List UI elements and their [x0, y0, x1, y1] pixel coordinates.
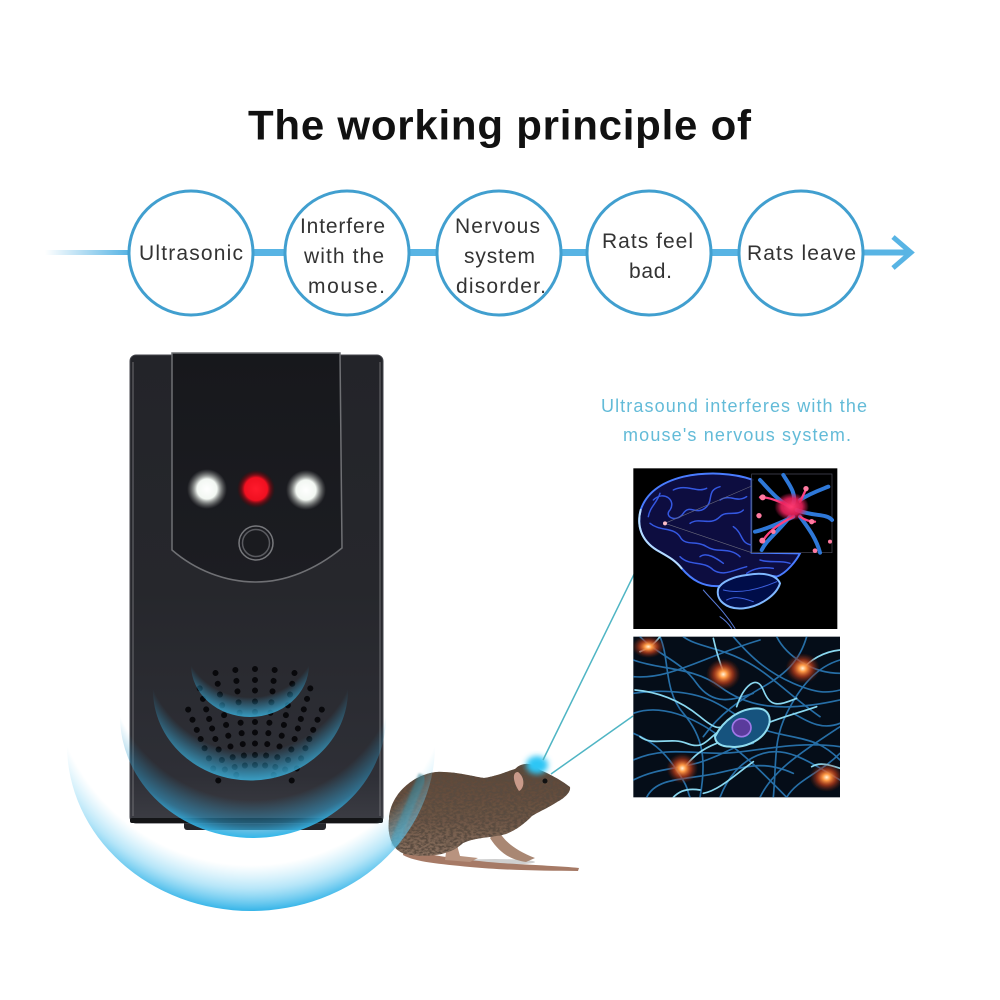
process flow: [45, 191, 911, 315]
middle wave: [153, 690, 348, 780]
rat hind foot: [445, 838, 478, 862]
cerebellum: [718, 574, 780, 609]
brain image: [633, 468, 837, 629]
inner wave: [191, 665, 309, 717]
step: Ultrasonic: Ultrasonic: [139, 242, 243, 265]
LED centre: [237, 470, 275, 508]
neuron: [755, 475, 832, 553]
brain outline: [639, 474, 800, 586]
inset highlight box: [752, 474, 832, 553]
rat front leg: [490, 830, 535, 862]
device body: [130, 355, 383, 823]
step: Nervous system disorder: disorder.: [456, 275, 546, 298]
device: [130, 353, 383, 830]
step: Nervous system disorder: Nervous: [455, 215, 540, 238]
nerve fibres, bright: [635, 637, 840, 797]
nucleus: [732, 719, 751, 737]
caption: ultrasound: Ultrasound interferes with the: [601, 396, 867, 416]
head glow: [526, 756, 548, 774]
neural network image: [632, 635, 844, 797]
step: Rats feel bad: bad.: [629, 260, 672, 283]
LED right: [286, 470, 326, 510]
control panel: [172, 353, 342, 582]
step: Interfere with the mouse: with the: [303, 245, 384, 268]
nerve fibres, dim: [633, 637, 840, 797]
step: Nervous system disorder: [437, 191, 561, 315]
rat shadow: [455, 859, 535, 865]
step: Rats leave: [739, 191, 863, 315]
step: Rats leave: Rats leave: [747, 242, 856, 265]
large device wave: [120, 716, 386, 838]
wave band over rat rear: [393, 775, 423, 846]
rat body: [389, 764, 570, 856]
rat tail: [403, 848, 579, 871]
step: Interfere with the mouse: [285, 191, 409, 315]
rat eye: [542, 778, 548, 784]
folds: [648, 487, 790, 573]
infographic canvas: [49, 109, 915, 911]
ultrasonic waves: [67, 665, 435, 911]
power button: [239, 526, 273, 560]
step: Nervous system disorder: system: [464, 245, 535, 268]
step: Interfere with the mouse: mouse.: [308, 275, 385, 298]
rat ear: [514, 772, 523, 791]
connector lines: [543, 552, 645, 774]
orange synapse glows: [633, 636, 664, 658]
rat: [389, 756, 579, 871]
caption: ultrasound: [601, 396, 867, 445]
connectors: [253, 249, 739, 256]
outer wave: [67, 745, 435, 911]
brain stem: [703, 590, 735, 628]
title: The working principle of: [248, 102, 752, 148]
caption: ultrasound: mouse's nervous system.: [623, 425, 851, 445]
step: Interfere with the mouse: Interfere: [300, 215, 385, 238]
outgoing arrow: [864, 237, 911, 268]
step: Ultrasonic: [129, 191, 253, 315]
neuron cell: [715, 708, 770, 747]
incoming arrow line: [45, 250, 129, 255]
device foot: [184, 815, 326, 830]
speaker holes: [188, 669, 322, 780]
LED left: [187, 469, 227, 509]
step: Rats feel bad: Rats feel: [602, 230, 693, 253]
step: Rats feel bad: [587, 191, 711, 315]
